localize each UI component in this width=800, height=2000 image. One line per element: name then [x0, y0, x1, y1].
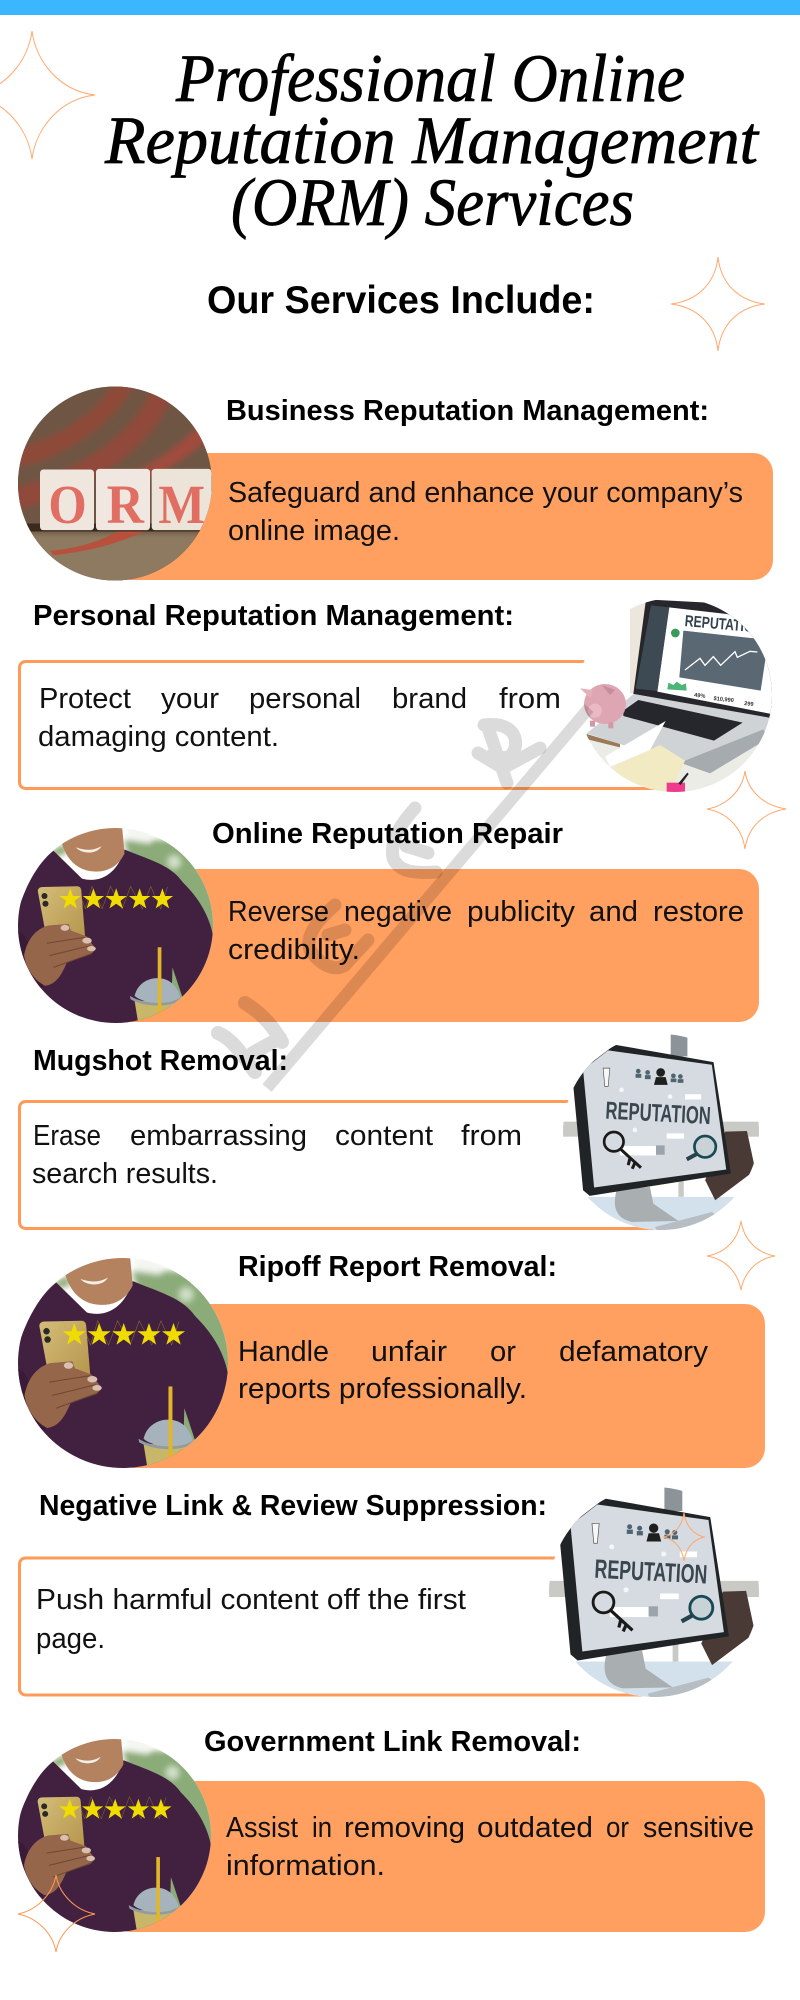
body text, justified: removing: [344, 1812, 465, 1844]
decorative sparkle over monitor: [664, 1513, 704, 1561]
panel: negative link and review suppression: [20, 1482, 769, 1712]
body text, justified: embarrassing: [130, 1120, 307, 1152]
panel: ripoff report removal: [9, 1249, 765, 1477]
title: Professional Online: [175, 40, 685, 116]
body text, justified: from: [499, 683, 561, 715]
body text, justified: your: [161, 683, 219, 715]
heading: Negative Link & Review Suppression:: [39, 1490, 547, 1522]
body text, justified: Protect: [39, 683, 131, 715]
body text, justified: and: [589, 896, 638, 928]
decorative sparkle right of laptop: [707, 771, 786, 849]
title: Reputation Management: [104, 102, 760, 178]
body text, justified: [32, 1120, 522, 1190]
top accent bar: [0, 0, 800, 15]
body text, justified: search results.: [32, 1158, 218, 1190]
body text, justified: unfair: [371, 1336, 447, 1368]
photo: man holding phone with five stars: [9, 1249, 240, 1477]
body text, justified: content: [335, 1120, 433, 1152]
heading: Business Reputation Management:: [226, 395, 709, 427]
title: (ORM) Services: [231, 164, 634, 240]
title: [104, 40, 760, 240]
panel: government link removal: [10, 1726, 765, 1940]
orange card: [110, 869, 759, 1022]
body text: [36, 1584, 466, 1655]
panel: business reputation management: [10, 380, 773, 590]
body text, justified: or: [606, 1812, 629, 1844]
orange card: [115, 1304, 765, 1468]
photo: laptop with reputation dashboard and piggy bank: $10,990: [713, 696, 734, 704]
photo: reputation monitor: REPUTATION: [594, 1554, 708, 1590]
photo: ORM blocks: O: [48, 474, 87, 535]
body text, justified: Erase: [33, 1120, 101, 1152]
outlined card: [20, 1558, 654, 1695]
panel: online reputation repair: [10, 818, 759, 1031]
body text, justified: outdated: [477, 1812, 593, 1844]
heading: Mugshot Removal:: [33, 1045, 288, 1077]
photo: laptop with reputation dashboard and piggy bank: [580, 600, 772, 792]
body text, justified: Handle: [238, 1336, 329, 1368]
decorative sparkle top-left: [0, 31, 95, 159]
photo: reputation monitor: REPUTATION: [605, 1098, 711, 1130]
body text: [228, 477, 743, 547]
photo: man holding phone with five stars: [10, 1731, 222, 1940]
body text, justified: damaging content.: [38, 721, 279, 753]
photo: laptop with reputation dashboard and piggy bank: 299: [744, 701, 754, 708]
photo: ORM blocks: R: [107, 474, 145, 535]
body text, justified: negative: [344, 896, 452, 928]
subheading: Our Services Include:: [207, 279, 595, 322]
decorative sparkle right of ripoff heading: [707, 1221, 775, 1290]
body text, justified: [238, 1336, 709, 1405]
body text, justified: credibility.: [228, 934, 360, 966]
body text, justified: from: [461, 1120, 522, 1152]
orange card: [110, 453, 773, 580]
body text, justified: [38, 683, 561, 753]
photo: man holding phone with five stars: [10, 820, 224, 1031]
photo: laptop with reputation dashboard and piggy bank: REPUTATIC: [684, 613, 754, 636]
body text, justified: sensitive: [643, 1812, 754, 1844]
body text, justified: or: [490, 1336, 516, 1368]
body text, justified: Assist: [226, 1812, 298, 1844]
heading: Ripoff Report Removal:: [238, 1251, 557, 1283]
heading: Personal Reputation Management:: [33, 600, 514, 632]
body text: Safeguard and enhance your company’s: [228, 477, 743, 509]
photo: laptop with reputation dashboard and piggy bank: 49%: [694, 693, 706, 700]
body text, justified: reports professionally.: [238, 1373, 527, 1405]
watermark: handwritten HEER with diagonal line: [218, 708, 589, 1088]
heading: Online Reputation Repair: [212, 818, 563, 850]
panel: mugshot removal: [20, 1030, 769, 1244]
body text: online image.: [228, 515, 400, 547]
outlined card: [20, 662, 674, 788]
heading: Government Link Removal:: [204, 1726, 581, 1758]
body text: page.: [36, 1623, 105, 1655]
body text, justified: [228, 896, 744, 966]
body text, justified: information.: [226, 1850, 385, 1882]
body text: Push harmful content off the first: [36, 1584, 466, 1616]
body text, justified: [226, 1812, 754, 1882]
body text, justified: personal: [249, 683, 361, 715]
decorative sparkle top-right: [671, 257, 765, 351]
body text, justified: publicity: [467, 896, 576, 928]
body text, justified: Reverse: [228, 896, 329, 928]
photo: reputation monitor: [549, 1488, 759, 1697]
body text, justified: restore: [653, 896, 744, 928]
body text, justified: defamatory: [559, 1336, 709, 1368]
decorative sparkle bottom-left: [18, 1875, 95, 1952]
photo: ORM blocks: M: [158, 474, 205, 535]
photo: ORM blocks: [18, 386, 212, 580]
orange card: [110, 1781, 765, 1932]
photo: reputation monitor: [563, 1034, 759, 1230]
body text, justified: brand: [392, 683, 467, 715]
body text, justified: in: [312, 1812, 332, 1844]
outlined card: [20, 1102, 662, 1228]
panel: personal reputation management: [20, 590, 780, 800]
